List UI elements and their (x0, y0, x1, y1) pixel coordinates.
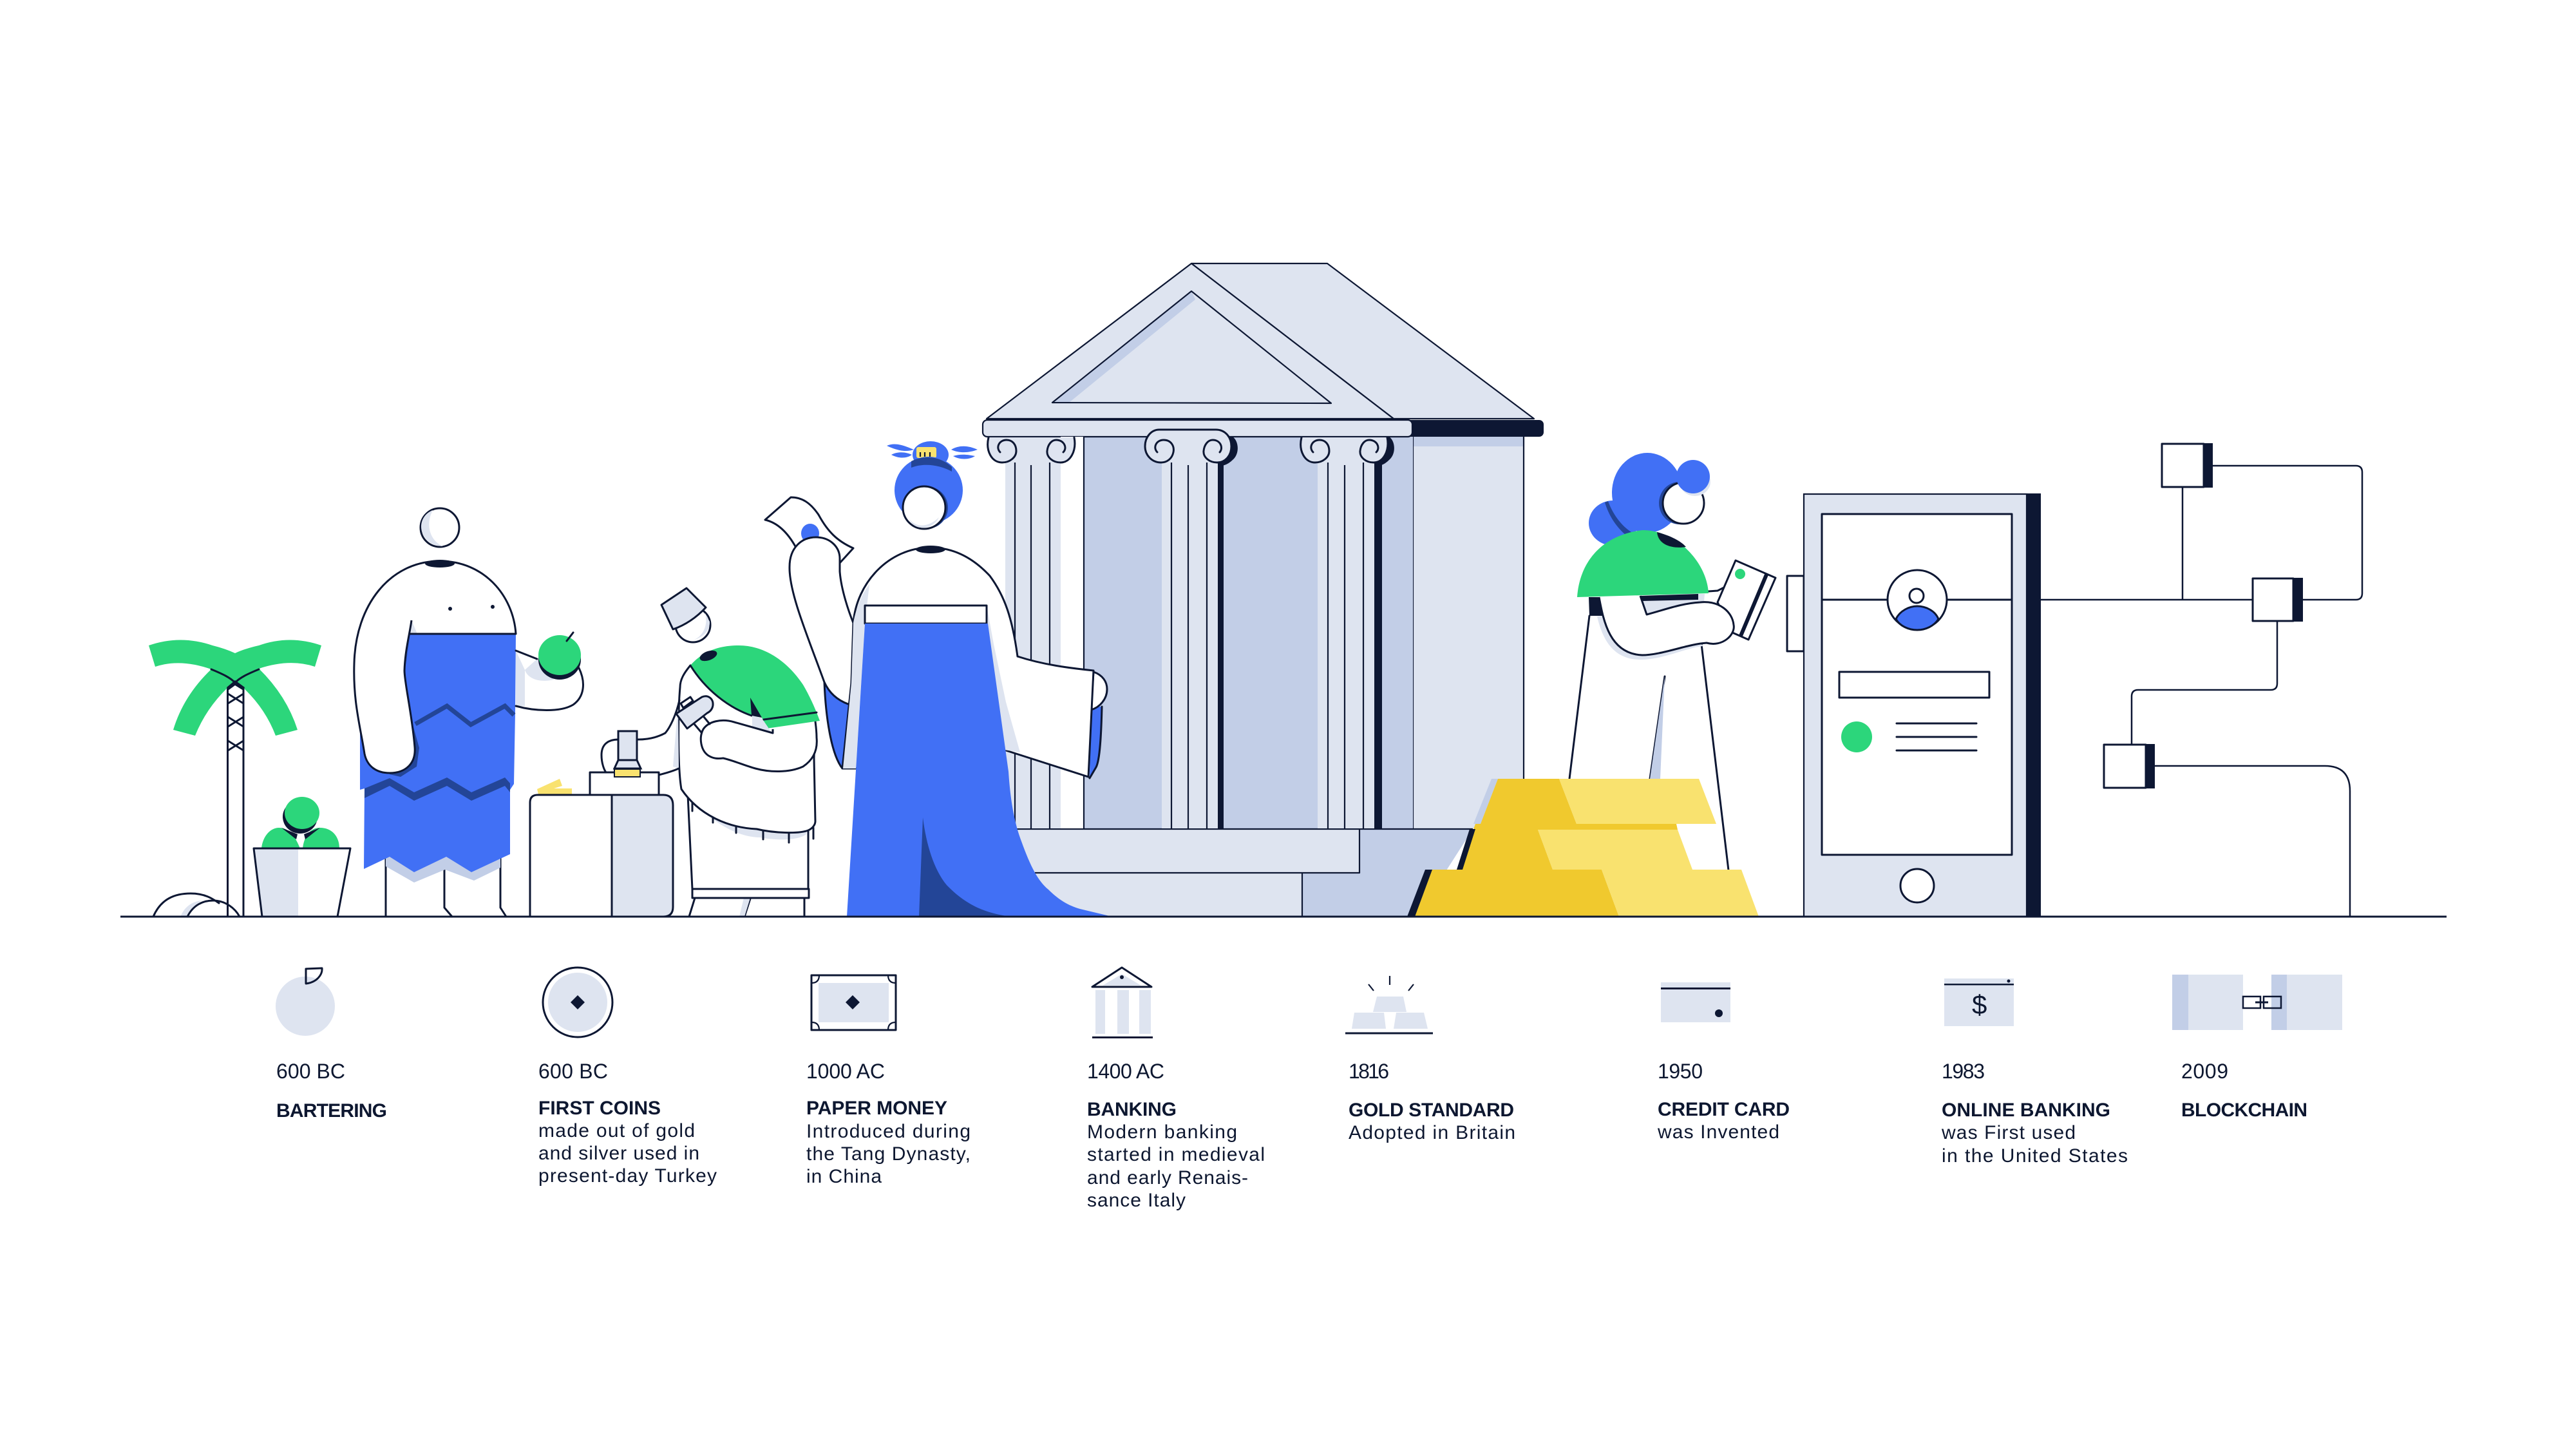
icon: coin (543, 968, 612, 1037)
block 2 (2253, 578, 2303, 622)
icon: linked blocks (2172, 975, 2342, 1030)
timeline item: first coins: and silver used in (538, 1143, 699, 1164)
block 3 (2104, 744, 2155, 788)
blockchain network (2041, 443, 2362, 917)
icon: browser with dollar (1944, 978, 2014, 1026)
hand and right sleeve (995, 656, 1107, 778)
timeline item: first coins: FIRST COINS (538, 1098, 661, 1119)
person 2: coin maker figure (601, 588, 820, 917)
person 4: credit card figure (1569, 453, 1776, 870)
timeline item: gold standard: 1816 (1349, 1060, 1389, 1083)
potted plant (254, 797, 350, 917)
timeline item: bartering: 600 BC (276, 1060, 345, 1083)
back wall (1084, 437, 1413, 828)
timeline item: banking: Modern banking (1087, 1121, 1237, 1143)
column 1 (988, 437, 1084, 828)
timeline item: gold standard: GOLD STANDARD (1349, 1100, 1514, 1121)
timeline item: paper money: the Tang Dynasty, (806, 1143, 971, 1165)
timeline item: paper money: Introduced during (806, 1121, 971, 1142)
timeline item: first coins: 600 BC (538, 1060, 608, 1083)
person 3: paper money figure with robes (765, 441, 1112, 917)
roof back (1191, 263, 1534, 419)
timeline item: paper money: in China (806, 1166, 882, 1187)
gold bars (1407, 779, 1759, 917)
timeline item: blockchain (2172, 975, 2342, 1121)
chest with coins (530, 772, 673, 917)
rocks (153, 893, 240, 917)
timeline item: first coins: present-day Turkey (538, 1165, 717, 1187)
timeline item: credit card (1657, 982, 1790, 1143)
timeline item: online banking: in the United States (1942, 1145, 2128, 1167)
head (421, 508, 459, 547)
timeline item: banking: sance Italy (1087, 1190, 1186, 1211)
timeline item: banking (1087, 968, 1265, 1211)
timeline item: online banking: ONLINE BANKING (1942, 1100, 2110, 1121)
icon: apple (276, 968, 335, 1036)
cornice (983, 420, 1544, 437)
timeline item: blockchain: 2009 (2181, 1060, 2228, 1083)
right wall (1413, 437, 1524, 828)
stamp held in hand (676, 696, 713, 732)
pediment (987, 263, 1394, 419)
robe (842, 546, 1112, 917)
timeline item: online banking: was First used (1941, 1122, 2076, 1143)
ground line (120, 916, 2447, 917)
timeline item: paper money (806, 975, 971, 1187)
timeline item: credit card: was Invented (1657, 1121, 1779, 1143)
timeline item: banking: started in medieval (1087, 1144, 1265, 1165)
timeline item: bartering (276, 968, 387, 1121)
timeline item: gold standard: Adopted in Britain (1349, 1122, 1515, 1143)
timeline item: blockchain: BLOCKCHAIN (2181, 1100, 2307, 1121)
timeline item: banking: and early Renais- (1087, 1167, 1248, 1188)
timeline item: online banking: 1983 (1942, 1060, 1985, 1083)
timeline item: bartering: BARTERING (276, 1100, 387, 1121)
home button (1900, 869, 1934, 902)
hand with apple (516, 633, 583, 711)
person 1: bartering figure (354, 508, 583, 917)
smartphone (1787, 493, 2041, 917)
timeline item: credit card: CREDIT CARD (1658, 1099, 1790, 1120)
column 2 (1145, 430, 1238, 828)
block 1 (2162, 443, 2213, 488)
timeline item: paper money: PAPER MONEY (806, 1098, 947, 1119)
inner triangle (1052, 291, 1331, 403)
icon: browser with dollar: $ (1972, 989, 1987, 1020)
green shawl (1577, 530, 1709, 597)
palm tree (149, 640, 321, 917)
timeline item: banking: BANKING (1087, 1099, 1177, 1120)
icon: bank (1092, 968, 1153, 1038)
avatar (1888, 570, 1947, 630)
timeline item: first coins (538, 968, 717, 1187)
timeline item: credit card: 1950 (1658, 1060, 1703, 1083)
hair (1589, 453, 1710, 546)
timeline item: banking: 1400 AC (1087, 1060, 1164, 1083)
credit card in hand (1709, 560, 1776, 640)
icon: card (1661, 982, 1730, 1022)
icon: gold bars (1345, 976, 1433, 1035)
column 3 (1301, 437, 1394, 828)
timeline item: first coins: made out of gold (538, 1120, 695, 1141)
timeline item: paper money: 1000 AC (806, 1060, 885, 1083)
steps (1016, 829, 1473, 917)
head with hat (661, 588, 710, 642)
stamping arm and stamp (601, 700, 679, 777)
head with hairpiece (887, 441, 978, 529)
timeline item: gold standard (1345, 976, 1515, 1143)
icon: banknote (811, 975, 896, 1030)
timeline item: online banking (1941, 978, 2128, 1167)
paper note (765, 497, 853, 563)
bank building (983, 263, 1544, 917)
